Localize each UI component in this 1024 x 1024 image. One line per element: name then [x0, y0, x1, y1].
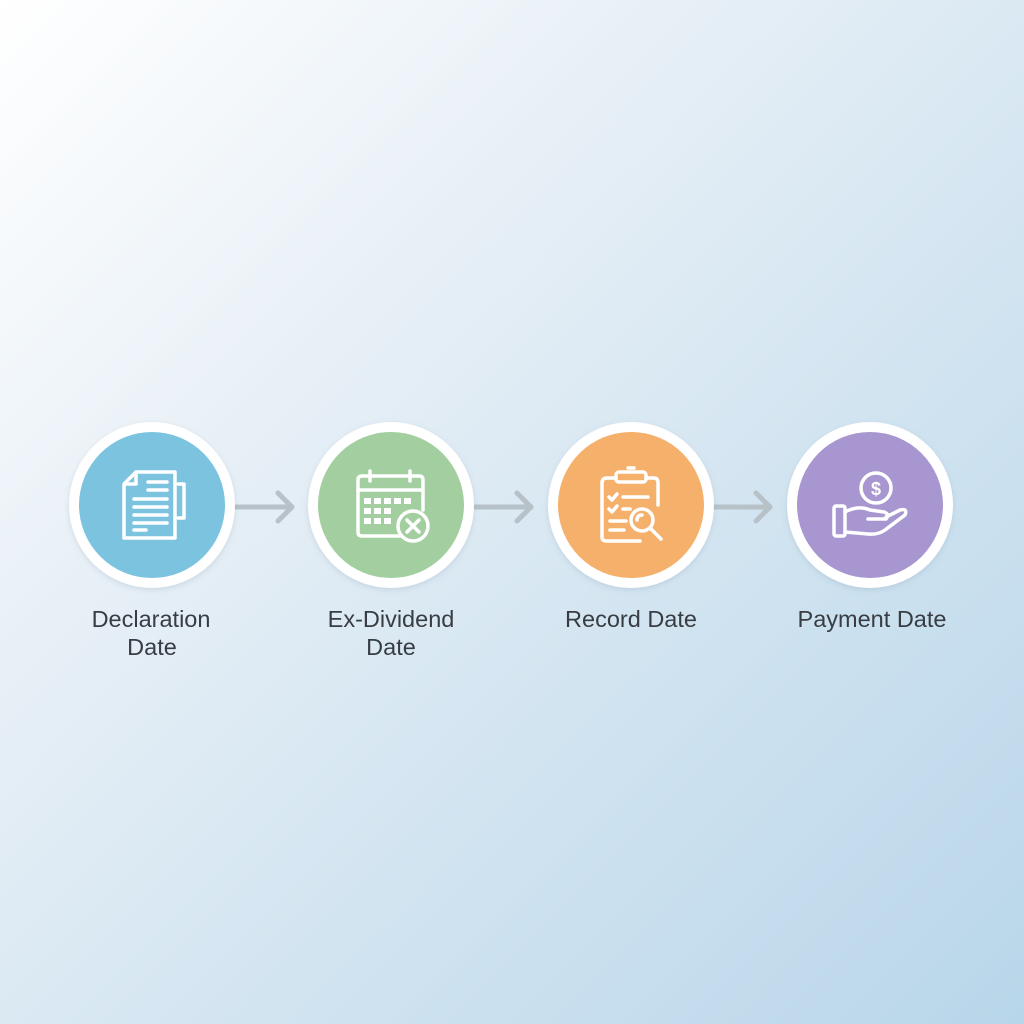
label: Ex-Dividend: [328, 606, 454, 632]
label: Record Date: [565, 606, 697, 632]
label: Declaration: [92, 606, 210, 632]
step 2: ex-dividend date: [308, 422, 474, 660]
icon: clipboard magnifier: [602, 468, 661, 541]
icon: calendar x: [358, 471, 428, 541]
step 3: record date: [548, 422, 714, 632]
arrow 2: [475, 493, 531, 521]
step 1: declaration date: [69, 422, 235, 660]
step 1: declaration date: Date: [127, 634, 177, 660]
step 4: payment date: [787, 422, 953, 632]
icon: hand with coin: [834, 473, 906, 536]
label: Payment Date: [798, 606, 946, 632]
arrow 3: [714, 493, 770, 521]
step 4: payment date: $: [871, 479, 881, 499]
step 2: ex-dividend date: Date: [366, 634, 416, 660]
arrow 1: [236, 493, 292, 521]
icon: document: [124, 472, 184, 538]
